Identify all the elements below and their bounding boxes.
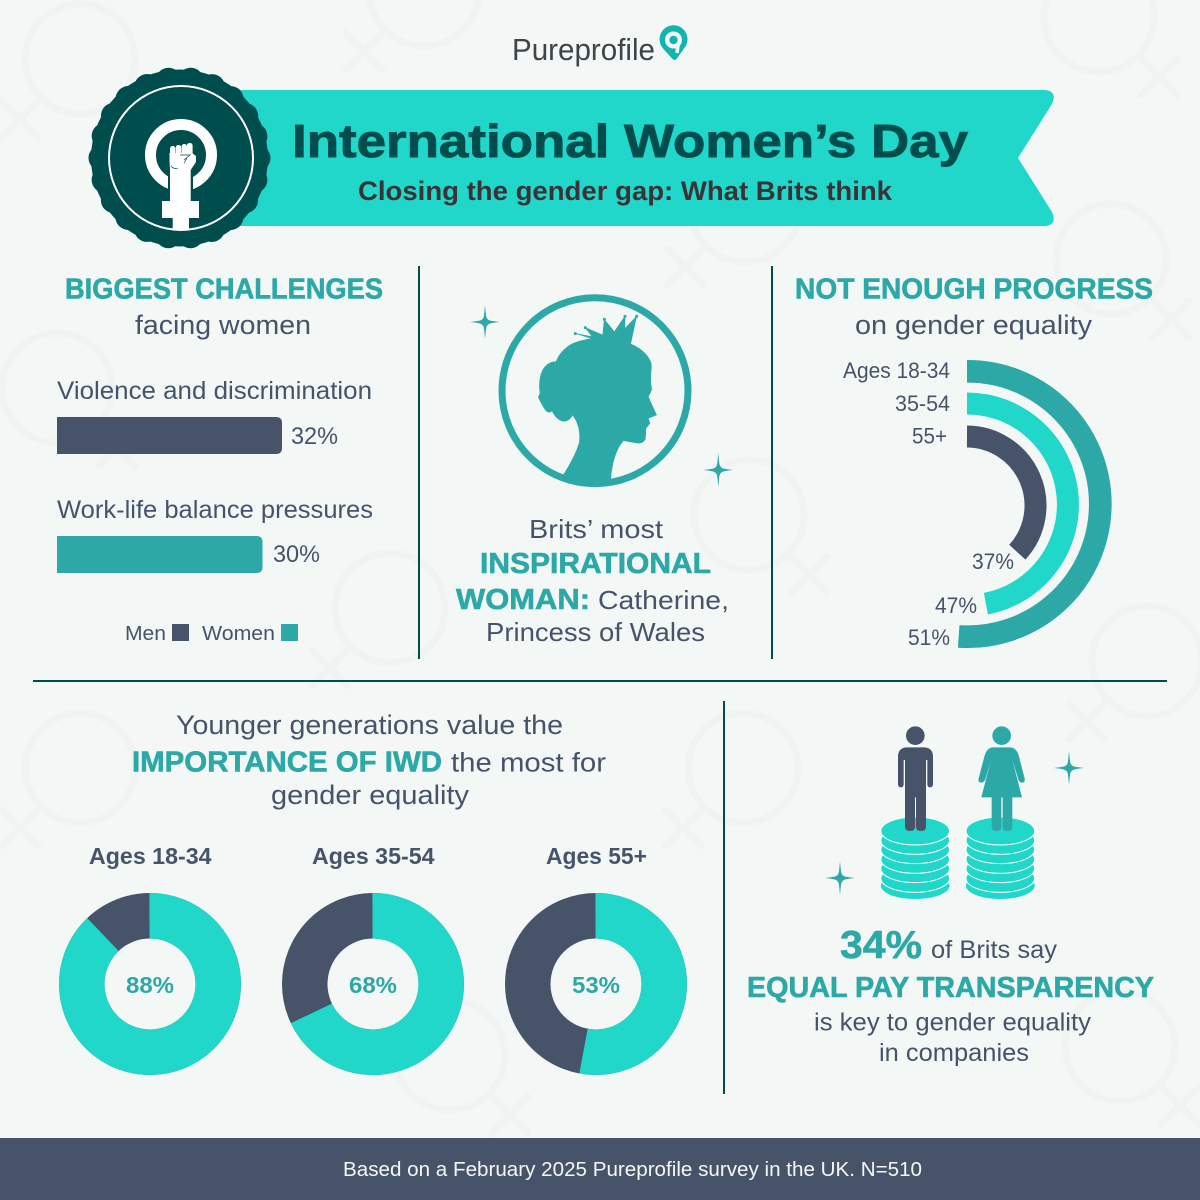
text: Brits' most inspirational woman: Brits’ most — [529, 514, 664, 544]
bar: violence and discrimination: Violence and discrimination — [57, 377, 372, 405]
icon: queen silhouette in circle — [502, 298, 688, 484]
text: equal pay transparency: in companies — [879, 1039, 1029, 1067]
chart labels — [843, 358, 1014, 650]
bar: violence and discrimination: 32% — [291, 423, 338, 450]
subheading: on gender equality: on gender equality — [855, 310, 1093, 340]
chart labels: 35-54 — [895, 391, 950, 416]
icon: location pin — [660, 25, 688, 60]
heading: importance of IWD: gender equality — [271, 780, 470, 810]
bar: violence and discrimination — [57, 377, 372, 454]
bar: work-life balance pressures: 30% — [273, 541, 320, 568]
text: Brits' most inspirational woman: Princess of Wales — [486, 617, 705, 647]
donut: ages 55+ — [528, 843, 664, 1052]
heading: not enough progress: NOT ENOUGH PROGRESS — [795, 274, 1153, 306]
subtitle: Closing the gender gap: What Brits think — [358, 176, 893, 206]
text: Brits' most inspirational woman — [456, 514, 729, 647]
panel: equal pay transparency — [747, 726, 1154, 1067]
subheading: facing women: facing women — [135, 310, 311, 340]
text: equal pay transparency: 34% — [840, 924, 922, 967]
icon: sparkle — [825, 861, 855, 895]
legend — [125, 623, 298, 645]
donut: ages 35-54: 68% — [349, 972, 397, 998]
text: equal pay transparency: EQUAL PAY TRANSPARENCY — [747, 972, 1154, 1004]
donut: ages 35-54 — [305, 843, 441, 1052]
panel: not enough progress — [795, 274, 1153, 650]
heading: importance of IWD — [132, 710, 606, 810]
bar: work-life balance pressures: Work-life balance pressures — [57, 496, 373, 524]
panel: biggest challenges — [57, 274, 383, 645]
text: Brits' most inspirational woman: Catherine, — [598, 585, 729, 615]
text: equal pay transparency — [747, 924, 1154, 1067]
icon: sparkle — [470, 305, 500, 339]
chart labels: 55+ — [912, 424, 947, 448]
radial bar chart — [959, 371, 1100, 637]
icon: man figure — [898, 726, 933, 831]
heading: importance of IWD: the most for — [451, 748, 606, 778]
icon: sparkle — [1054, 751, 1084, 785]
text: Brits' most inspirational woman: INSPIRATIONAL — [480, 548, 711, 580]
donut: ages 55+: 53% — [572, 972, 620, 998]
title banner — [230, 90, 1054, 226]
donut: ages 18-34: Ages 18-34 — [89, 843, 212, 869]
icon: sparkle — [703, 453, 733, 487]
text: equal pay transparency: is key to gender equality — [814, 1008, 1092, 1036]
footer: Based on a February 2025 Pureprofile survey in the UK. N=510 — [343, 1159, 922, 1181]
bar: work-life balance pressures — [57, 496, 373, 573]
icon: woman figure — [978, 726, 1025, 831]
legend: Women — [202, 623, 275, 645]
chart labels: 37% — [972, 549, 1014, 574]
chart labels: 51% — [908, 625, 950, 650]
heading: biggest challenges: BIGGEST CHALLENGES — [65, 274, 383, 306]
text: Brits' most inspirational woman: WOMAN: — [456, 584, 590, 616]
icon: badge with raised fist in female symbol — [91, 70, 268, 246]
chart labels: Ages 18-34 — [843, 358, 950, 383]
donut: ages 18-34: 88% — [126, 972, 174, 998]
icon: coin stacks — [881, 817, 1035, 899]
donut: ages 18-34 — [82, 843, 218, 1052]
heading: importance of IWD: Younger generations value the — [176, 710, 563, 740]
legend: Men — [125, 623, 166, 645]
panel: importance of IWD — [82, 710, 664, 1052]
donut: ages 35-54: Ages 35-54 — [312, 843, 435, 869]
heading: importance of IWD: IMPORTANCE OF IWD — [132, 746, 442, 778]
title: International Women’s Day — [292, 115, 968, 167]
footer — [0, 1138, 1200, 1200]
chart labels: 47% — [935, 593, 977, 618]
panel: most inspirational woman — [456, 298, 733, 647]
logo: Pureprofile: Pureprofile — [512, 32, 655, 67]
text: equal pay transparency: of Brits say — [931, 936, 1057, 964]
donut: ages 55+: Ages 55+ — [546, 843, 647, 869]
dividers — [33, 266, 1167, 1094]
